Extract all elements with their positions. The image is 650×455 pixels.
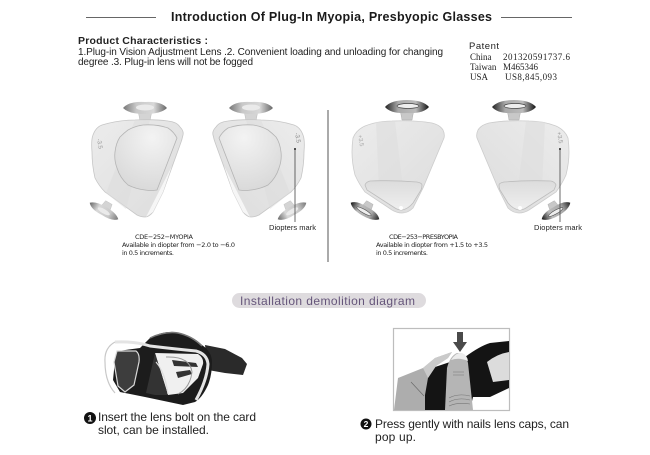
step 1 text: 1 <box>87 414 93 424</box>
illustration: pressing lens cap <box>394 328 510 410</box>
icon: left presbyopia lens: +3.5 <box>356 134 364 148</box>
icon: right myopia lens <box>213 102 309 223</box>
icon: left myopia lens: -3.5 <box>95 138 103 150</box>
step 2 text: Press gently with nails lens caps, can <box>375 417 569 431</box>
step 2 text: 2 <box>364 419 369 429</box>
step 2 text <box>360 417 569 444</box>
icon: right presbyopia lens <box>477 100 573 224</box>
panel: presbyopia lenses <box>348 100 582 257</box>
divider <box>327 110 329 262</box>
icon: right presbyopia lens: +3.5 <box>555 131 563 145</box>
diopters mark callout <box>269 148 316 232</box>
illustration: mask with lens insert <box>105 332 247 405</box>
patent list: China <box>470 52 492 62</box>
icon: left myopia lens <box>87 102 183 223</box>
icon: left presbyopia lens <box>348 100 444 224</box>
patent list: US8,845,093 <box>505 72 558 82</box>
patent list: Patent <box>469 41 499 52</box>
presbyopia caption <box>376 233 488 257</box>
icon: right myopia lens: -3.5 <box>293 132 301 144</box>
product characteristics text: 1.Plug-in Vision Adjustment Lens .2. Convenient loading and unloading for changing <box>78 47 443 58</box>
step 1 text: slot, can be installed. <box>98 423 209 437</box>
title: Introduction Of Plug-In Myopia, Presbyopic Glasses <box>171 10 492 24</box>
diopters mark callout: Diopters mark <box>534 223 582 232</box>
patent list: USA <box>470 72 489 82</box>
presbyopia caption: Available in diopter from +1.5 to +3.5 <box>376 241 488 249</box>
patent list: 201320591737.6 <box>503 52 570 62</box>
icon: down arrow <box>453 332 467 352</box>
myopia caption: in 0.5 increments. <box>122 249 174 257</box>
product characteristics text <box>78 35 443 68</box>
patent list: M465346 <box>503 62 539 72</box>
section heading pill: Installation demolition diagram <box>240 294 415 308</box>
presbyopia caption: in 0.5 increments. <box>376 249 428 257</box>
product characteristics text: degree .3. Plug-in lens will not be fogged <box>78 57 253 68</box>
myopia caption: CDE−252−MYOPIA <box>135 233 194 241</box>
step 2 text: pop up. <box>375 430 416 444</box>
presbyopia caption: CDE−253−PRESBYOPIA <box>389 233 459 241</box>
myopia caption: Available in diopter from −2.0 to −6.0 <box>122 241 235 249</box>
patent list: Taiwan <box>470 62 497 72</box>
step 1 text <box>84 410 256 437</box>
diopters mark callout: Diopters mark <box>269 223 316 232</box>
step 1 text: Insert the lens bolt on the card <box>98 410 256 424</box>
panel: myopia lenses <box>87 102 316 257</box>
patent list <box>469 41 570 82</box>
diopters mark callout <box>534 148 582 232</box>
product characteristics text: Product Characteristics : <box>78 35 208 47</box>
myopia caption <box>122 233 235 257</box>
